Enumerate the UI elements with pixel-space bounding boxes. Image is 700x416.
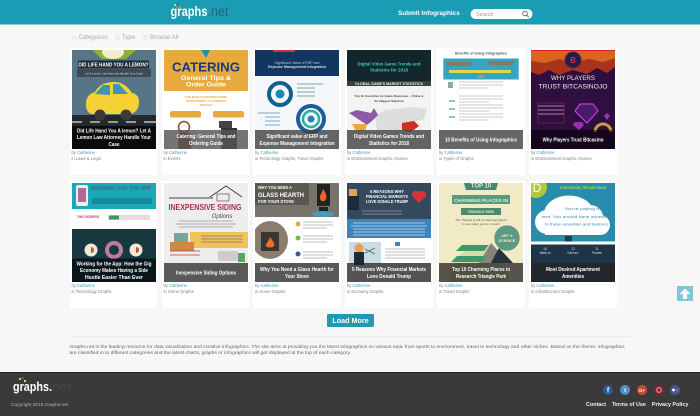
thumbnail: catering: SERVICE bbox=[199, 102, 212, 106]
thumbnail: financial markets: Love Donald Trump bbox=[367, 273, 411, 279]
thumbnail: glass hearth: GLASS HEARTH bbox=[258, 192, 304, 198]
footer bbox=[0, 372, 700, 416]
filter bar bbox=[72, 34, 178, 41]
thumbnail: apartment amenities: rent. You should have access bbox=[542, 214, 607, 218]
thumbnail: catering bbox=[164, 50, 248, 149]
filter bar: Categories bbox=[78, 34, 108, 41]
logo: .net bbox=[208, 4, 229, 19]
header bar bbox=[0, 0, 700, 25]
thumbnail: catering: CATERING bbox=[172, 60, 240, 74]
byline: by Catherine bbox=[72, 150, 95, 154]
search box: Search bbox=[476, 12, 493, 18]
thumbnail: video games: GLOBAL GAME'S MARKET STATISTICS bbox=[355, 82, 424, 86]
thumbnail: bitcasino: B bbox=[570, 56, 576, 64]
thumbnail: triangle park: ART & bbox=[501, 234, 513, 238]
thumbnail: glass hearth: FOR YOUR STOVE bbox=[258, 198, 294, 204]
thumbnail: triangle park: The Triangle is full of charming places bbox=[455, 218, 507, 222]
footer links: Contact Terms of Use Privacy Policy bbox=[586, 402, 688, 408]
thumbnail: triangle park: Top 10 Charming Places in bbox=[452, 266, 510, 272]
search box bbox=[470, 9, 532, 19]
thumbnail: apartment amenities: Walk-in bbox=[540, 250, 551, 254]
thumbnail: video games: Statistics for 2018 bbox=[369, 140, 409, 146]
thumbnail: apartment amenities: 12 bbox=[571, 246, 575, 250]
category: in Events bbox=[164, 156, 181, 161]
thumbnail: apartment amenities: Most Desired Apartment bbox=[546, 266, 600, 272]
byline: by Catherine bbox=[255, 282, 278, 288]
category: in Entertainment Graphs, Games bbox=[531, 156, 592, 161]
thumbnail: gig economy: WORKING FOR THE APP bbox=[90, 186, 151, 192]
thumbnail: financial markets: FINANCIAL MARKETS bbox=[366, 194, 408, 198]
byline: by Catherine bbox=[439, 150, 462, 154]
thumbnail: catering: THE MAIN CONSIDERATIONS bbox=[184, 94, 227, 98]
byline: by Catherine bbox=[439, 282, 462, 288]
thumbnail: video games: Statistics for 2018 bbox=[370, 67, 408, 72]
byline: by Catherine bbox=[531, 150, 554, 154]
thumbnail: ERP: Significant Value of ERP and bbox=[274, 60, 320, 64]
thumbnail: bitcasino: WHY PLAYERS bbox=[551, 74, 596, 82]
social icons: t bbox=[624, 388, 626, 394]
thumbnail: apartment amenities: 15 bbox=[543, 246, 547, 250]
byline: by Catherine bbox=[347, 282, 370, 288]
load more button bbox=[327, 314, 374, 327]
thumbnail: financial markets bbox=[347, 183, 431, 282]
thumbnail: lemon: Let A Lemon Law Attorney Handle Your Case bbox=[84, 71, 143, 75]
byline: by Catherine bbox=[164, 150, 187, 154]
byline: by Catherine bbox=[255, 150, 278, 154]
load more button: Load More bbox=[332, 316, 369, 325]
thumbnail: apartment amenities bbox=[531, 182, 615, 282]
thumbnail: bitcasino: TRUST BITCASINOJO bbox=[538, 83, 608, 90]
card: financial markets bbox=[345, 181, 432, 308]
thumbnail: apartment amenities: to these amenities and features. bbox=[545, 222, 609, 226]
category: in Home Graphs bbox=[255, 289, 285, 294]
category: in Economy Graphs bbox=[347, 289, 383, 294]
thumbnail: video games: Top 10 Countries by Game Revenues – China is bbox=[354, 94, 424, 98]
card: gig economy bbox=[70, 181, 157, 308]
thumbnail: financial markets: LOVE DONALD TRUMP bbox=[366, 198, 408, 204]
category: in Infrastructure Graphs bbox=[531, 289, 574, 294]
thumbnail: catering: Order Guide bbox=[186, 82, 226, 88]
thumbnail: glass hearth: WHY YOU NEED A bbox=[258, 184, 292, 190]
site description: are classified in to different categories and the latest charts, graphs or infographics will get displayed at the top of each category. bbox=[70, 350, 351, 356]
thumbnail: video games bbox=[347, 50, 431, 149]
thumbnail: catering: General Tips & bbox=[180, 76, 231, 82]
thumbnail: apartment amenities: Kitchen bbox=[568, 250, 579, 254]
thumbnail: gig economy: Hustle Easier Than Ever bbox=[84, 274, 143, 280]
thumbnail: siding: Inexpensive Siding Options bbox=[176, 270, 236, 276]
thumbnail: triangle park: TRIANGLE PARK bbox=[468, 210, 495, 214]
copyright: Copyright 2018 Graphs.net bbox=[11, 402, 68, 408]
category: in Technology Graphs bbox=[72, 289, 111, 294]
byline: by Catherine bbox=[531, 282, 554, 288]
card: triangle park bbox=[437, 181, 524, 308]
card: siding bbox=[162, 181, 249, 308]
category: in Home Graphs bbox=[164, 289, 194, 294]
category: in Types of Graphs bbox=[439, 156, 474, 161]
card: benefits bbox=[437, 48, 524, 175]
social icons: f bbox=[607, 388, 610, 394]
footer logo: graphs. bbox=[13, 379, 52, 394]
thumbnail: apartment amenities: You're paying the bbox=[564, 206, 604, 210]
site description: Graphs.net is the leading resource for data visualization and creative infographics. The site aims at providing you the latest infographics on various topic from sports to environment, travel to technology and other niches. Based on the theme, infographics bbox=[70, 344, 625, 350]
category: in Entertainment Graphs, Games bbox=[347, 156, 408, 161]
thumbnail: triangle park: SCIENCE bbox=[499, 238, 516, 242]
thumbnail: gig economy bbox=[72, 183, 156, 282]
social icons bbox=[603, 385, 680, 395]
category: in Technology Graphs, Travel Graphs bbox=[255, 156, 323, 161]
category: in Travel Graphs bbox=[439, 289, 469, 294]
logo: graphs bbox=[170, 4, 208, 19]
thumbnail: lemon: Case bbox=[108, 141, 119, 147]
thumbnail: siding: Options bbox=[211, 214, 232, 220]
thumbnail: gig economy: THE DIGGERS bbox=[76, 214, 98, 218]
thumbnail: bitcasino bbox=[531, 50, 615, 149]
thumbnail: benefits: Benefits of Using Infographics bbox=[455, 51, 507, 55]
thumbnail: video games: the Biggest Standout bbox=[374, 98, 404, 102]
thumbnail: glass hearth: Your Stove bbox=[285, 273, 309, 279]
byline: by Catherine bbox=[347, 150, 370, 154]
thumbnail: ERP bbox=[255, 50, 339, 149]
category: in Laws & Legal bbox=[72, 156, 101, 161]
card: lemon law bbox=[70, 48, 157, 175]
scroll to top button bbox=[677, 286, 693, 301]
thumbnail: video games: Digital Video Game Trends and bbox=[358, 61, 421, 66]
thumbnail: benefits: SEO bbox=[477, 74, 485, 78]
card: apartment amenities bbox=[529, 181, 616, 308]
thumbnail: financial markets: 5 REASONS WHY bbox=[370, 188, 404, 194]
byline: by Catherine bbox=[72, 282, 95, 288]
card: video games bbox=[345, 48, 432, 175]
thumbnail: lemon bbox=[72, 50, 156, 149]
thumbnail: ERP: Expense Management Integration bbox=[268, 64, 327, 68]
filter bar: Browse All bbox=[150, 34, 178, 41]
thumbnail: triangle park bbox=[439, 183, 523, 282]
site description bbox=[70, 344, 625, 356]
footer logo: net bbox=[52, 379, 71, 394]
card: ERP bbox=[253, 48, 340, 175]
thumbnail: triangle park: TOP 10 bbox=[471, 183, 492, 189]
filter bar: Type bbox=[122, 34, 136, 41]
thumbnail: catering: Ordering Guide bbox=[188, 140, 222, 146]
thumbnail: apartment amenities: 11 bbox=[595, 246, 599, 250]
social icons: G+ bbox=[639, 388, 645, 393]
thumbnail: triangle park: CHARMING PLACES IN bbox=[454, 198, 509, 202]
thumbnail: siding bbox=[164, 183, 248, 282]
byline: by Catherine bbox=[164, 282, 187, 288]
thumbnail: apartment amenities: Private bbox=[592, 250, 602, 254]
thumbnail: apartment amenities: Amenities bbox=[562, 273, 584, 279]
thumbnail: catering: Catering: General Tips and bbox=[176, 134, 235, 140]
thumbnail: glass hearth bbox=[255, 183, 339, 282]
card: glass hearth bbox=[253, 181, 340, 308]
thumbnail: catering: WHEN HIRING A CATERING bbox=[186, 98, 226, 102]
thumbnail: triangle park: to see when you're in town! bbox=[462, 222, 500, 226]
thumbnail: triangle park: Research Triangle Park bbox=[456, 273, 507, 279]
card: bitcasino bbox=[529, 48, 616, 175]
submit infographics link: Submit Infographics bbox=[398, 10, 460, 17]
card: catering bbox=[162, 48, 249, 175]
thumbnail: apartment amenities: Community Should Have bbox=[560, 184, 606, 190]
thumbnail: benefits bbox=[439, 51, 523, 149]
